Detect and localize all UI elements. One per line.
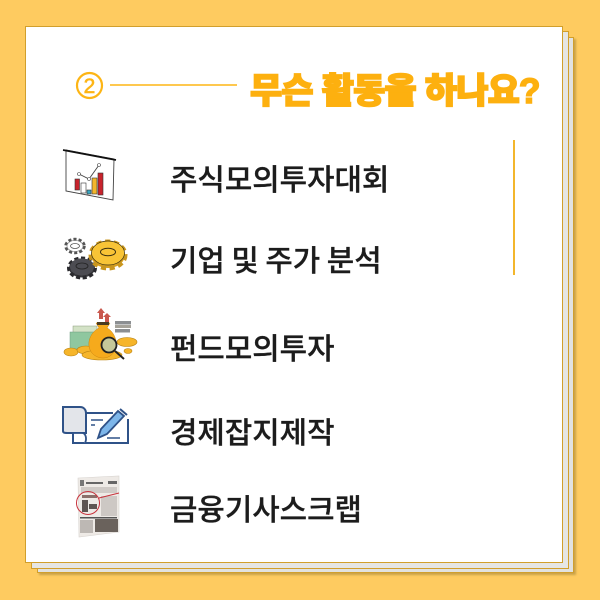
item text: 주식모의투자대회: 주식모의투자대회 (170, 164, 389, 197)
title: 무슨 활동을 하나요? (250, 72, 540, 111)
icon: money bag with magnifier (64, 308, 138, 360)
icon: presentation chart (62, 149, 116, 200)
heading number and connector line: 2 (84, 75, 95, 98)
item text: 펀드모의투자: 펀드모의투자 (170, 333, 334, 366)
item text: 금융기사스크랩: 금융기사스크랩 (170, 494, 362, 527)
back sheet (37, 37, 574, 573)
item text: 기업 및 주가 분석: 기업 및 주가 분석 (170, 245, 382, 278)
icon: newspaper clipping (76, 476, 120, 538)
icon: document and pen (62, 406, 129, 444)
icon: gears (64, 238, 128, 280)
heading number and connector line (76, 72, 237, 100)
vertical accent line (513, 140, 515, 275)
item text: 경제잡지제작: 경제잡지제작 (170, 417, 334, 450)
